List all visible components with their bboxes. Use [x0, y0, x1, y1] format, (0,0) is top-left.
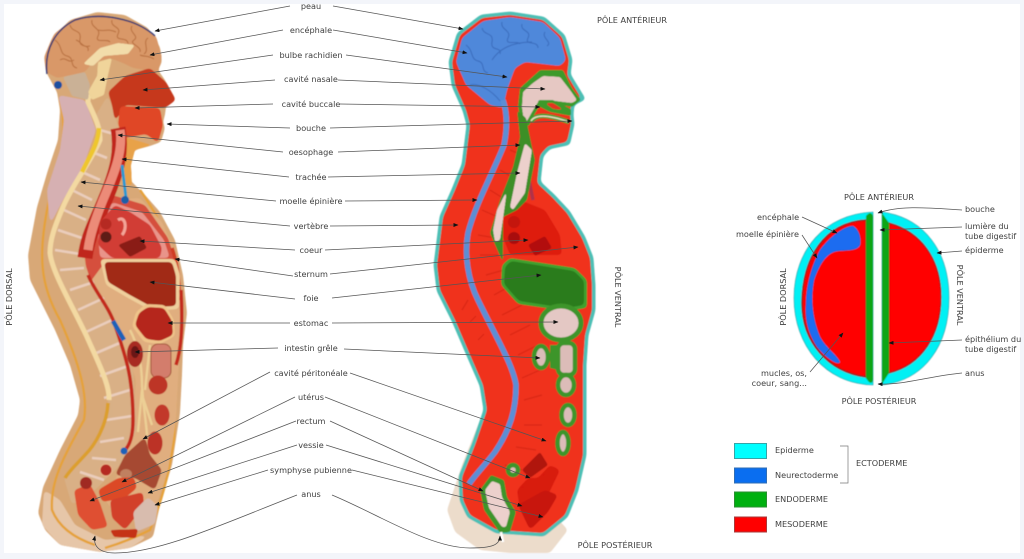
schematic labels: bouche — [965, 204, 995, 214]
leader lines: left body — [78, 6, 297, 553]
organ labels column — [270, 1, 352, 499]
organ labels column: bulbe rachidien — [279, 50, 343, 60]
rectum ring — [100, 464, 112, 476]
schematic labels: moelle épinière — [736, 229, 799, 239]
schematic labels: tube digestif — [965, 344, 1017, 354]
legend: mesoderme: MESODERME — [775, 519, 828, 529]
schematic embryo section — [794, 212, 949, 385]
organ labels column: sternum — [294, 269, 328, 279]
pubic symphysis — [133, 497, 158, 532]
organ labels column: cavité nasale — [284, 74, 338, 84]
schematic body: germ-layer section — [437, 15, 592, 553]
organ labels column: vessie — [298, 440, 324, 450]
left half: endoderm — [866, 213, 873, 383]
schematic labels: tube digestif — [965, 231, 1017, 241]
schematic labels — [736, 191, 1021, 406]
thoracic lining — [83, 195, 176, 285]
schematic labels: épithélium du — [965, 334, 1021, 344]
organ labels column: estomac — [294, 318, 328, 328]
chest and abdomen cavity — [92, 198, 181, 525]
stomach — [132, 304, 175, 344]
anal opening — [501, 532, 503, 542]
neurectoderm — [806, 226, 860, 363]
pelvic organs — [517, 452, 560, 530]
legend — [734, 444, 907, 532]
legend: epiderme — [734, 444, 814, 458]
left half: mesoderm — [802, 220, 866, 377]
pharynx and trachea — [85, 128, 119, 258]
organ labels column: peau — [301, 1, 321, 11]
intestines — [127, 341, 171, 454]
legend: neurectoderme: Neurectoderme — [775, 470, 838, 480]
legend: epiderme: Epiderme — [775, 445, 814, 455]
schematic labels: PÔLE DORSAL — [777, 268, 788, 326]
pale lower skin — [42, 490, 150, 552]
organ labels column: rectum — [297, 416, 326, 426]
silhouette — [28, 12, 187, 552]
organ labels column: utérus — [298, 392, 324, 402]
schematic labels: PÔLE POSTÉRIEUR — [842, 395, 917, 406]
mesoderm body — [437, 15, 592, 533]
organ labels column: foie — [303, 293, 319, 303]
pole label: anterior, right body: PÔLE ANTÉRIEUR — [597, 14, 667, 25]
legend: neurectoderme — [734, 468, 838, 483]
epidermis outline — [437, 15, 592, 533]
neurectoderm brain — [456, 17, 566, 108]
leader lines: right body — [325, 6, 578, 548]
subcutaneous orange line — [42, 100, 180, 548]
legend: ectoderme bracket: ECTODERME — [856, 458, 907, 468]
organ labels column: symphyse pubienne — [270, 465, 352, 475]
legend: endoderme — [734, 492, 828, 507]
organ labels column: trachée — [295, 172, 327, 182]
schematic leader lines — [802, 208, 962, 384]
oral cavity and tongue — [118, 106, 163, 143]
organ labels column: bouche — [296, 123, 326, 133]
schematic labels: épiderme — [965, 245, 1004, 255]
vertebral column — [50, 95, 137, 505]
schematic labels: PÔLE ANTÉRIEUR — [844, 191, 914, 202]
legend: ectoderme bracket — [840, 446, 907, 483]
legend: mesoderme — [734, 517, 828, 532]
legend: endoderme: ENDODERME — [775, 494, 828, 504]
blood vessels in neck — [122, 165, 126, 198]
schematic labels: lumière du — [965, 221, 1009, 231]
neck front tissue — [118, 135, 152, 185]
schematic labels: coeur, sang... — [752, 378, 807, 388]
schematic labels: anus — [965, 368, 985, 378]
mauve vessel — [528, 175, 533, 200]
left half: epidermis — [794, 212, 873, 385]
organ labels column: encéphale — [290, 25, 332, 35]
peritoneal cavity — [115, 437, 162, 490]
neck posterior tissue — [47, 95, 96, 225]
endoderm: nasal lining — [518, 70, 581, 126]
nasal cavity — [108, 68, 176, 122]
mesentery — [130, 330, 152, 435]
organ labels column: anus — [301, 489, 321, 499]
pole label: dorsal, left body: PÔLE DORSAL — [3, 268, 14, 326]
organ labels column: moelle épinière — [280, 196, 342, 206]
vena cava — [113, 321, 124, 340]
aorta and abdominal wall — [88, 275, 182, 452]
anatomical body: left realistic section — [28, 12, 187, 552]
pink nasal cavity — [522, 76, 577, 122]
endoderm: oesophagus and trachea — [490, 110, 535, 263]
spinal cord — [50, 62, 109, 400]
organ labels column: cavité péritonéale — [274, 368, 348, 378]
palate — [538, 100, 571, 116]
organ labels column: vertèbre — [294, 221, 328, 231]
right half: endoderm — [882, 213, 889, 384]
neurectoderm spinal tube — [466, 100, 516, 484]
bladder — [110, 492, 144, 530]
liver — [100, 259, 180, 311]
uterus — [98, 477, 137, 502]
schematic labels: mucles, os, — [761, 368, 807, 378]
endoderm: intestines — [508, 343, 575, 475]
organ labels column: oesophage — [289, 147, 333, 157]
right half: epidermis — [882, 212, 949, 385]
endoderm: stomach — [541, 306, 581, 340]
tongue surface — [531, 116, 569, 122]
heart — [502, 200, 562, 256]
organ labels column: cavité buccale — [282, 99, 340, 109]
pale lower-body silhouette — [447, 420, 568, 553]
sternum — [172, 248, 179, 300]
vertebral texture — [462, 150, 542, 470]
pole label: ventral, right body: PÔLE VENTRAL — [613, 267, 624, 328]
right half: mesoderm — [889, 223, 941, 373]
pole label: posterior, right body: PÔLE POSTÉRIEUR — [578, 539, 653, 550]
heart — [98, 205, 162, 258]
endoderm: rectum — [480, 475, 516, 533]
pelvic rectum — [74, 484, 108, 530]
brain — [44, 14, 162, 100]
vertebrae — [55, 130, 132, 480]
endoderm: liver — [501, 258, 587, 311]
schematic labels: PÔLE VENTRAL — [955, 265, 966, 326]
organ labels column: intestin grêle — [284, 343, 338, 353]
schematic labels: encéphale — [757, 212, 799, 222]
organ labels column: coeur — [300, 245, 323, 255]
